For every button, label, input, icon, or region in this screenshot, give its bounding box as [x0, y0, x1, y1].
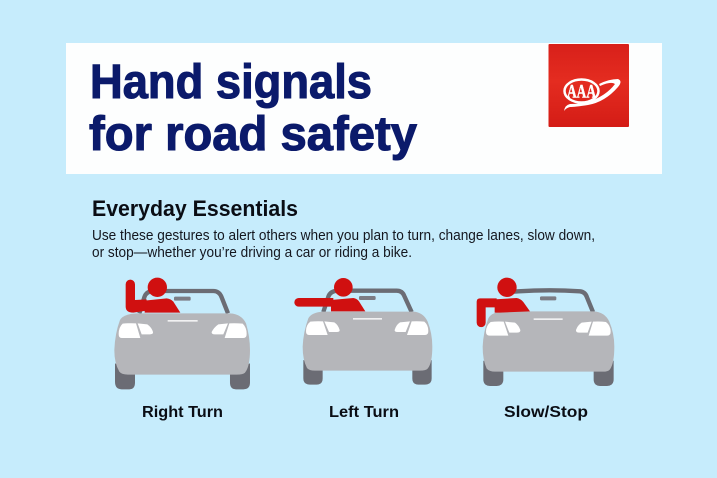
title: Hand signals — [90, 56, 372, 109]
panel: right turn — [114, 278, 250, 389]
intro text — [92, 228, 595, 261]
header band — [66, 43, 662, 174]
car: right turn — [114, 291, 250, 389]
driver: arm extended — [294, 278, 365, 311]
icon: AAA logo: AAA — [567, 82, 596, 102]
title — [89, 56, 417, 161]
intro text: Use these gestures to alert others when you plan to turn, change lanes, slow down, — [92, 228, 595, 244]
heading: Everyday Essentials: Everyday Essentials — [92, 196, 298, 221]
title: for road safety — [89, 108, 417, 161]
car: slow/stop — [483, 290, 614, 386]
intro text: or stop—whether you’re driving a car or riding a bike. — [92, 245, 412, 261]
driver: arm raised — [126, 278, 180, 313]
car: left turn — [303, 291, 432, 385]
label: Right Turn: Right Turn — [142, 404, 223, 421]
panel: slow/stop — [477, 278, 614, 386]
label: Left Turn: Left Turn — [329, 404, 399, 421]
driver: arm lowered — [477, 278, 530, 327]
label: Slow/Stop: Slow/Stop — [504, 404, 588, 421]
icon: AAA logo — [548, 44, 629, 127]
panel: left turn — [294, 278, 432, 385]
